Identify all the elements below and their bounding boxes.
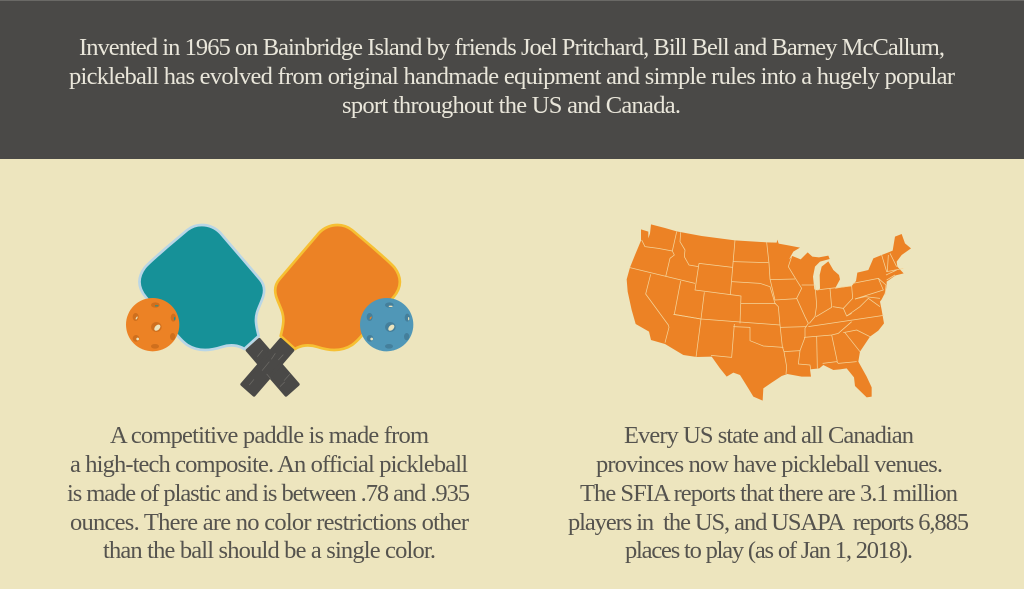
left caption: paddle and ball details	[67, 422, 470, 564]
right caption: venues and players: The SFIA reports that there are 3.1 million	[580, 480, 958, 507]
intro text: pickleball has evolved from original handmade equipment and simple rules into a hugely popular	[69, 63, 955, 90]
right caption: venues and players: provinces now have pickleball venues.	[596, 451, 943, 478]
icon: blue ball	[360, 298, 413, 351]
left caption: paddle and ball details: than the ball should be a single color.	[103, 537, 436, 564]
right caption: venues and players: players in the US, and USAPA reports 6,885	[568, 509, 969, 536]
icon: paddle handles	[242, 340, 298, 395]
intro text: Invented in 1965 on Bainbridge Island by friends Joel Pritchard, Bill Bell and Barney McCallum,	[79, 34, 945, 61]
icon: crossed paddles with balls	[126, 225, 413, 395]
left caption: paddle and ball details: ounces. There are no color restrictions other	[70, 509, 469, 536]
intro text	[69, 34, 955, 119]
icon: orange paddle	[275, 225, 400, 350]
header band	[0, 0, 1024, 159]
right caption: venues and players: Every US state and all Canadian	[624, 422, 914, 449]
map: contiguous United States	[627, 224, 911, 401]
left caption: paddle and ball details: a high-tech composite. An official pickleball	[70, 451, 468, 478]
intro text: sport throughout the US and Canada.	[342, 92, 681, 119]
left caption: paddle and ball details: A competitive paddle is made from	[110, 422, 429, 449]
left caption: paddle and ball details: is made of plastic and is between .78 and .935	[67, 480, 470, 507]
icon: orange ball	[126, 298, 179, 351]
icon: teal paddle	[139, 225, 264, 350]
right caption: venues and players: places to play (as of Jan 1, 2018).	[625, 537, 913, 564]
map: land outline	[627, 224, 911, 401]
map: state borders	[630, 232, 903, 374]
right caption: venues and players	[568, 422, 969, 564]
